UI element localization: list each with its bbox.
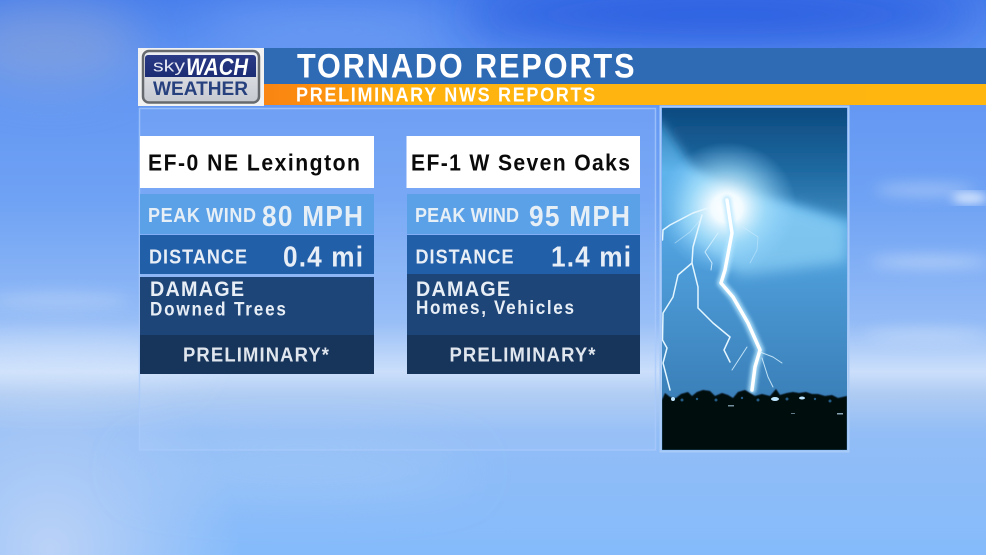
damage row: DAMAGE — [416, 277, 510, 301]
title bar — [264, 48, 986, 84]
location heading: EF-0 NE Lexington — [148, 150, 360, 176]
distance row — [407, 235, 640, 274]
preliminary footer: PRELIMINARY* — [450, 344, 596, 367]
subtitle: PRELIMINARY NWS REPORTS — [296, 85, 595, 107]
treeline silhouette — [662, 389, 847, 450]
distance row: 1.4 mi — [551, 241, 631, 273]
translucent content panel — [140, 108, 656, 450]
peak wind row — [140, 194, 374, 234]
logo: skyWACH Weather — [138, 48, 264, 106]
preliminary footer — [140, 335, 374, 374]
subtitle bar — [264, 84, 986, 105]
peak wind row: 80 MPH — [262, 200, 363, 232]
location heading — [140, 136, 374, 188]
damage row — [407, 274, 640, 335]
peak wind row: PEAK WIND — [415, 205, 519, 227]
damage row — [140, 277, 374, 335]
title: TORNADO REPORTS — [297, 47, 635, 85]
damage row: Homes, Vehicles — [416, 297, 574, 318]
location heading: EF-1 W Seven Oaks — [411, 150, 630, 176]
damage row: DAMAGE — [150, 277, 244, 301]
peak wind row: PEAK WIND — [148, 205, 256, 227]
header banner — [264, 47, 986, 107]
distance row: 0.4 mi — [283, 241, 363, 273]
logo: skyWACH Weather: sky — [153, 56, 186, 76]
logo: skyWACH Weather: WEATHER — [153, 78, 248, 100]
preliminary footer — [407, 335, 640, 374]
panel: EF-1 W Seven Oaks — [406, 136, 640, 374]
peak wind row: 95 MPH — [529, 200, 630, 232]
panel: EF-0 NE Lexington — [140, 136, 374, 374]
distance row: DISTANCE — [149, 247, 247, 269]
distance row: DISTANCE — [416, 247, 514, 269]
logo: skyWACH Weather: WACH — [186, 54, 249, 81]
photo: lightning strike — [660, 106, 850, 452]
distance row — [140, 235, 374, 274]
location heading — [406, 136, 640, 188]
damage row: Downed Trees — [150, 299, 286, 320]
preliminary footer: PRELIMINARY* — [183, 344, 329, 367]
peak wind row — [407, 194, 640, 234]
